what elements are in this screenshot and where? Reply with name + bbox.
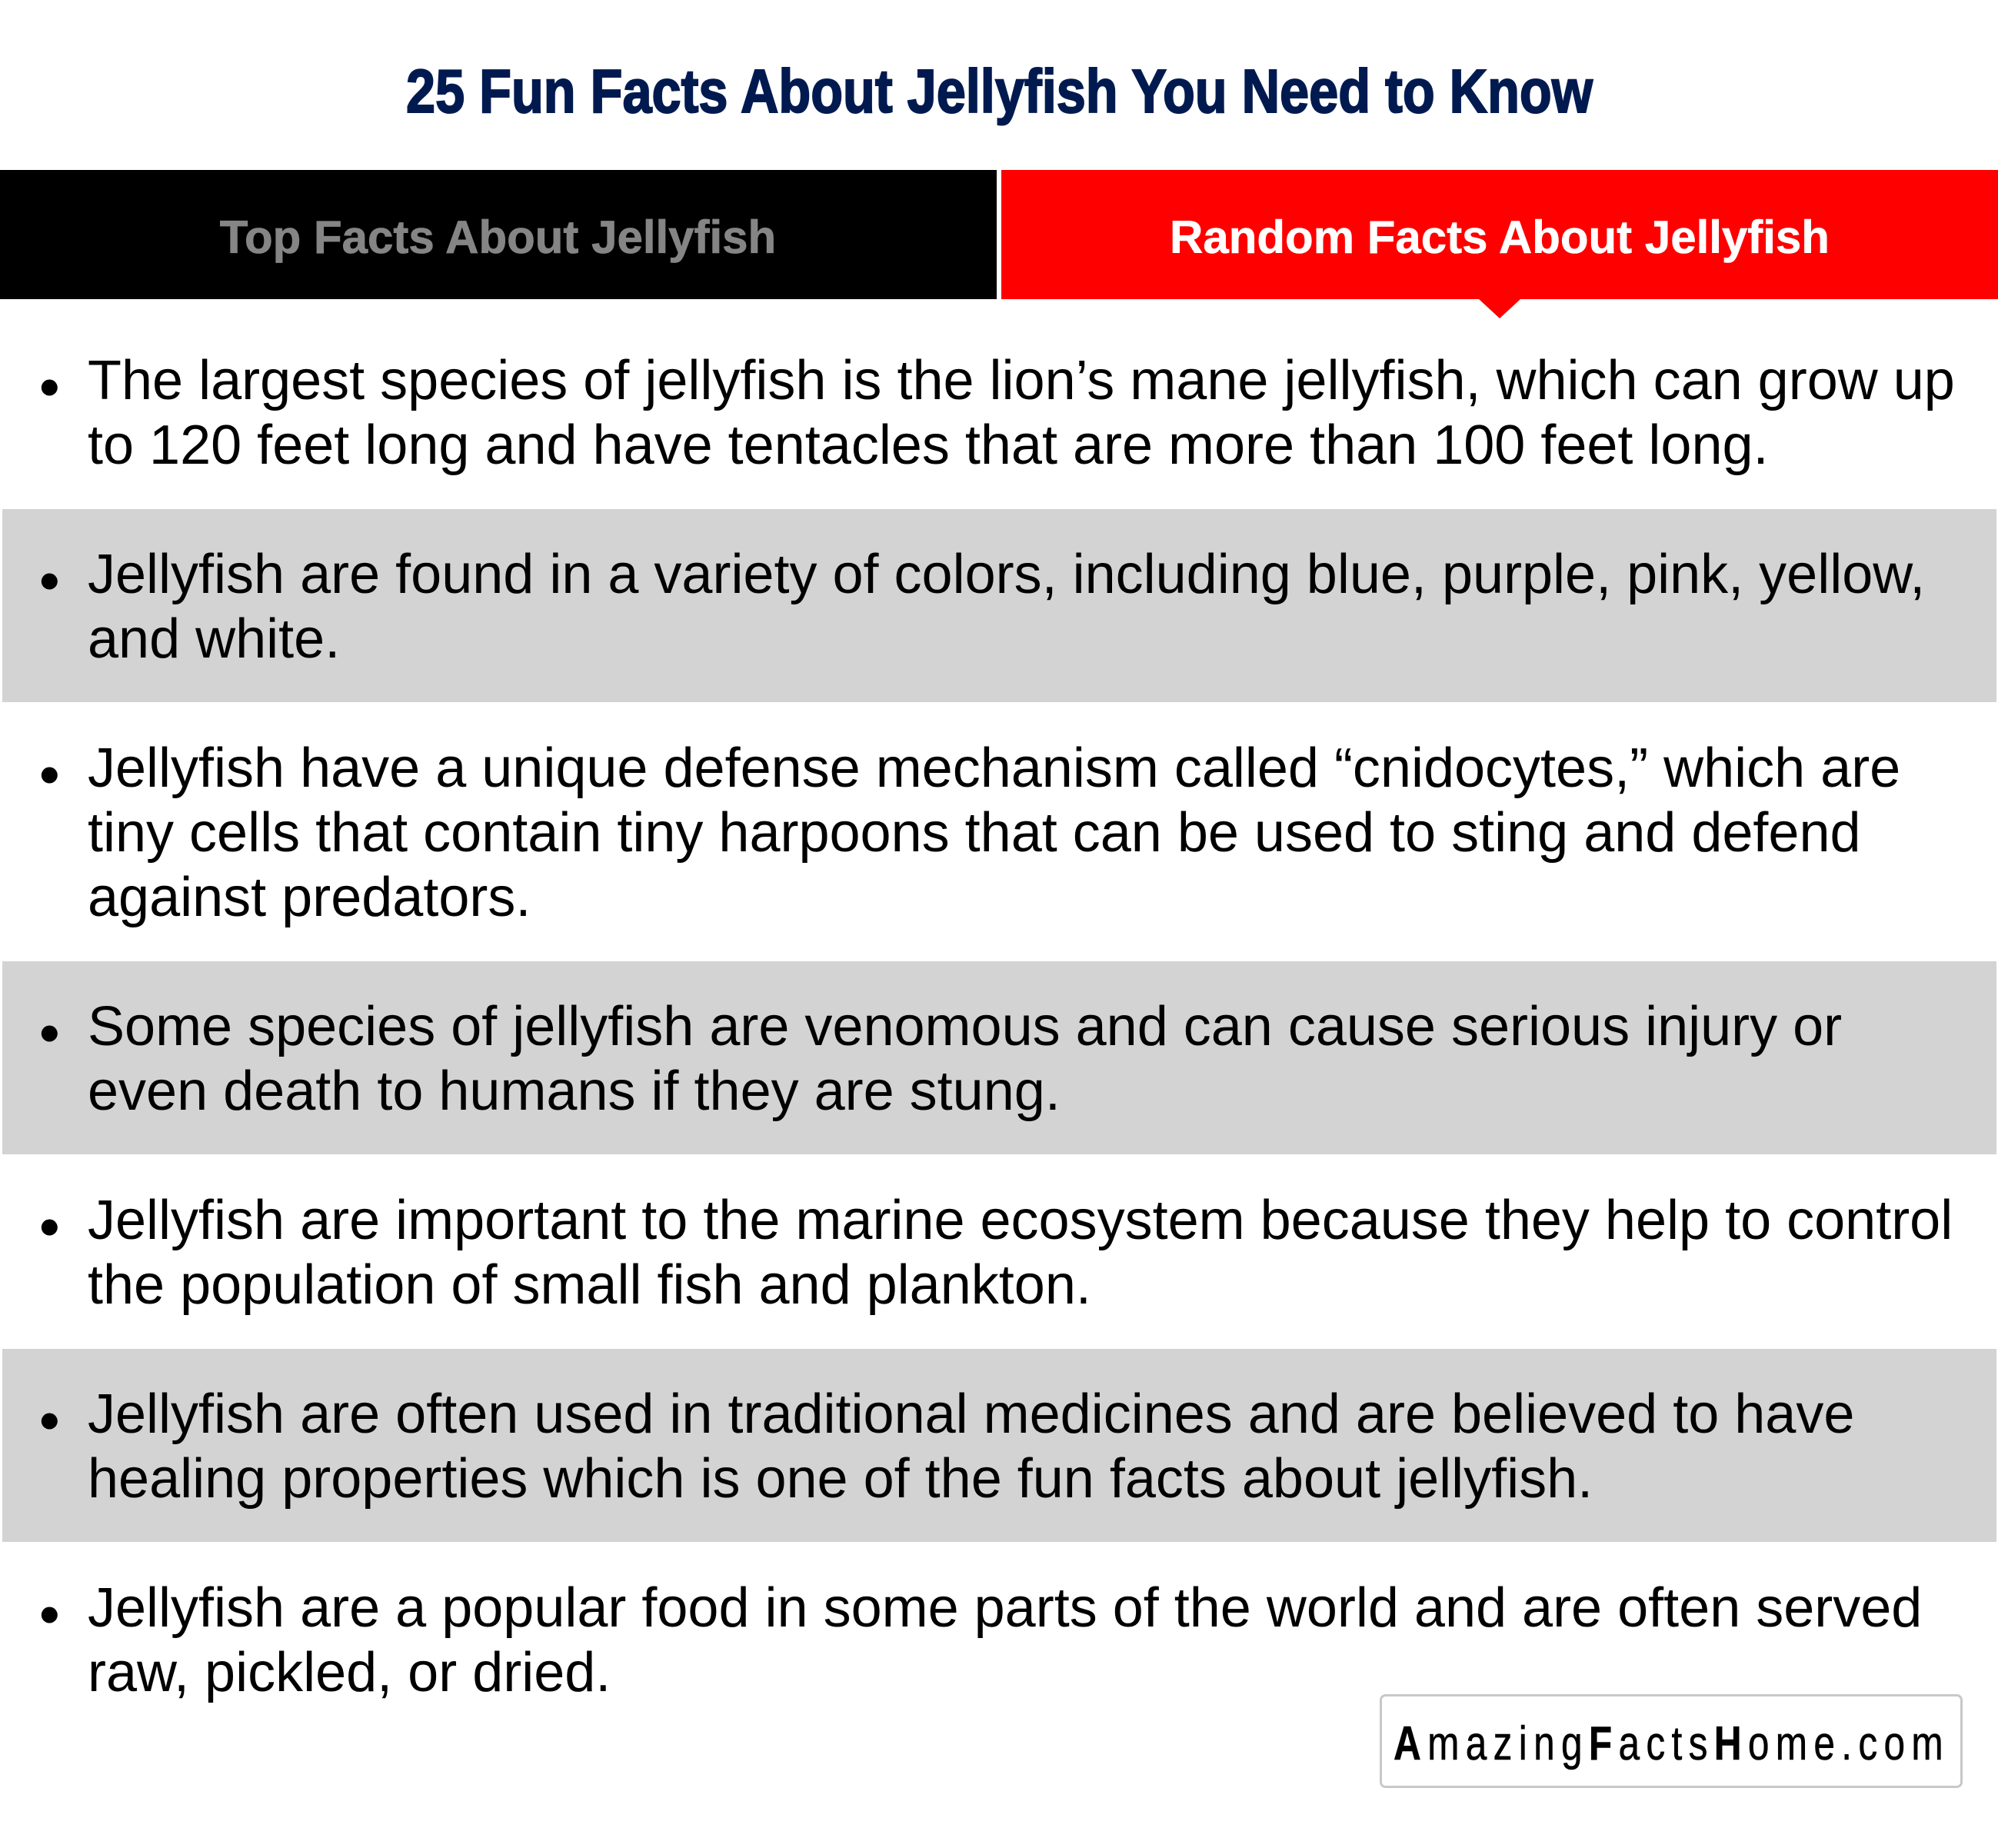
fact 1: The largest species of jellyfish is the lion’s mane jellyfish, which can grow up <box>88 350 1955 411</box>
fact 3: against predators. <box>88 867 531 928</box>
fact 5: the population of small fish and plankton. <box>88 1254 1091 1316</box>
fact 1 <box>42 350 1955 476</box>
tab: random facts (active) <box>1001 170 1998 318</box>
fact 4: Some species of jellyfish are venomous and can cause serious injury or <box>88 996 1842 1057</box>
fact 6: Jellyfish are often used in traditional medicines and are believed to have <box>88 1384 1854 1445</box>
fact 4: even death to humans if they are stung. <box>88 1061 1061 1122</box>
title: 25 Fun Facts About Jellyfish You Need to Know <box>406 57 1593 125</box>
watermark logo: AmazingFactsHome.com <box>1394 1716 1950 1770</box>
tab: random facts (active): Random Facts About Jellyfish <box>1170 211 1830 263</box>
fact 2: Jellyfish are found in a variety of colors, including blue, purple, pink, yellow, <box>88 544 1925 605</box>
fact 7: Jellyfish are a popular food in some parts of the world and are often served <box>88 1577 1922 1639</box>
fact 7 <box>42 1577 1922 1703</box>
fact 3: tiny cells that contain tiny harpoons that can be used to sting and defend <box>88 802 1861 864</box>
tab: top facts: Top Facts About Jellyfish <box>220 211 776 263</box>
fact 2: and white. <box>88 608 340 670</box>
watermark logo <box>1381 1695 1961 1787</box>
fact 6 <box>2 1349 1996 1542</box>
fact 5 <box>42 1190 1953 1316</box>
tab: top facts <box>0 170 997 299</box>
fact 7: raw, pickled, or dried. <box>88 1642 611 1703</box>
fact 6: healing properties which is one of the fun facts about jellyfish. <box>88 1448 1593 1510</box>
fact 4 <box>2 961 1996 1154</box>
fact 1: to 120 feet long and have tentacles that are more than 100 feet long. <box>88 415 1769 476</box>
fact 2 <box>2 509 1996 702</box>
fact 3: Jellyfish have a unique defense mechanism called “cnidocytes,” which are <box>88 738 1900 799</box>
fact 3 <box>42 738 1900 928</box>
fact 5: Jellyfish are important to the marine ecosystem because they help to control <box>88 1190 1953 1251</box>
